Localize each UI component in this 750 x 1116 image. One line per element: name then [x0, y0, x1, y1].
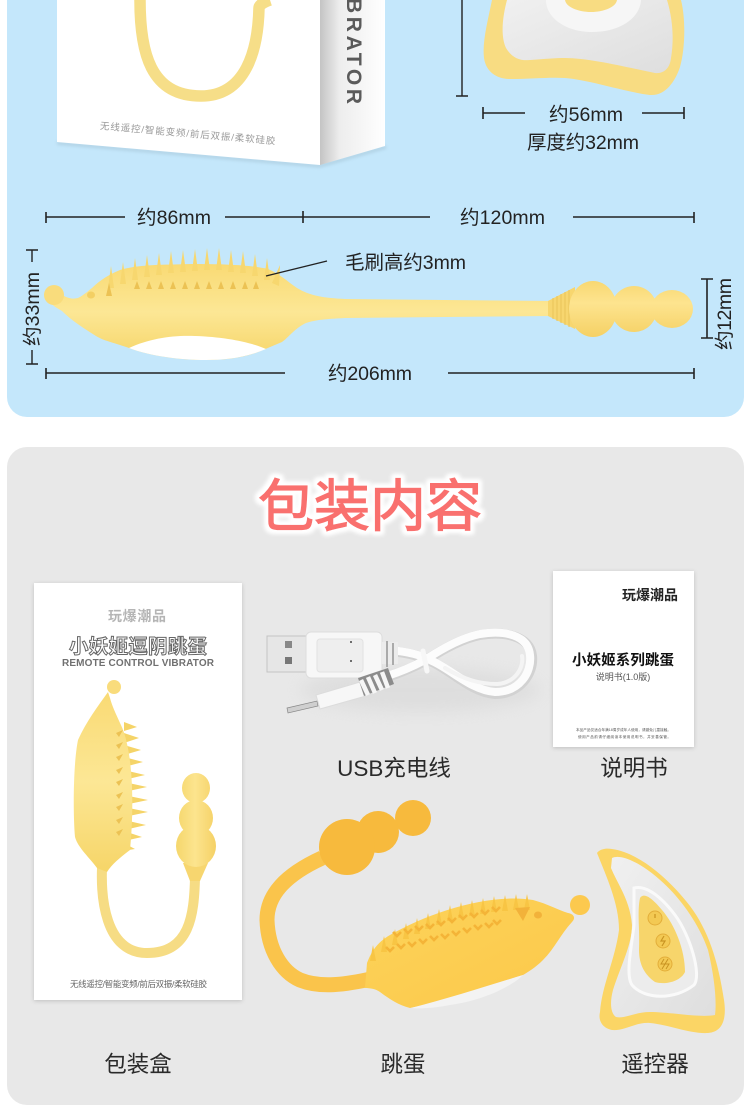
panel: dimensions [7, 0, 744, 417]
manual subtitle: 说明书(1.0版) [596, 671, 650, 682]
usb metal plug [267, 636, 308, 672]
dimension: 86mm [46, 207, 303, 229]
manual note [576, 727, 671, 739]
dimension: 120mm [303, 207, 694, 229]
dimension: 33mm [22, 250, 44, 364]
remote button pad [639, 896, 685, 983]
dimension: remote width: 约56mm [549, 104, 623, 126]
tail stem and body [50, 264, 552, 360]
manual note: 使用产品前请仔细阅读本使用说明书，并妥善保管。 [578, 734, 671, 739]
dimension: 86mm: 约86mm [137, 207, 211, 229]
white belly [129, 336, 266, 360]
label: box: 包装盒 [104, 1052, 172, 1077]
egg nose [570, 895, 590, 915]
bristle callout: 毛刷高约3mm [345, 252, 466, 274]
box side text: BRATOR [342, 0, 365, 104]
label: egg: 跳蛋 [380, 1052, 426, 1077]
egg white belly [411, 975, 523, 1008]
dimension: 12mm: 约12mm [714, 278, 736, 350]
packaging box, cropped at top [57, 0, 386, 166]
label: remote: 遥控器 [621, 1052, 689, 1077]
dimension: 206mm: 约206mm [328, 363, 412, 385]
dimension: remote height [456, 0, 468, 96]
remote inner ring [629, 887, 697, 996]
bristle bumps [106, 281, 259, 296]
item: usb cable [267, 632, 540, 713]
manual title: 小妖姬系列跳蛋 [572, 651, 674, 669]
box caption: 无线遥控/智能变频/前后双振/柔软硅胶 [70, 979, 207, 989]
product side view [44, 248, 693, 360]
dimension: 12mm [701, 278, 736, 350]
dimension: 33mm: 约33mm [22, 272, 44, 346]
remote white face [611, 857, 716, 1017]
usb housing [306, 632, 398, 678]
cable [387, 633, 532, 694]
item: package box [34, 583, 242, 1000]
box tube [140, 0, 270, 96]
box caption: 无线遥控/智能变频/前后双振/柔软硅胶 [99, 120, 276, 147]
box subtitle: REMOTE CONTROL VIBRATOR [62, 658, 215, 669]
egg body [365, 899, 574, 1008]
thickness text: 厚度约32mm [527, 132, 639, 154]
manual logo: 玩爆潮品 [622, 587, 678, 603]
ridged collar [548, 287, 575, 329]
egg spikes [370, 894, 530, 961]
label: usb cable: USB充电线 [337, 756, 451, 781]
label: manual: 说明书 [600, 756, 668, 781]
egg tube [267, 858, 375, 985]
dc plug [287, 668, 394, 713]
product front view [74, 680, 216, 953]
item: remote [597, 849, 725, 1033]
head ball [44, 285, 64, 305]
spikes [108, 248, 280, 288]
egg ear and eye [515, 907, 542, 921]
manual note: 本品产品仅适合年满18周岁成年人使用，请避免儿童接触。 [576, 727, 671, 732]
item: manual [553, 571, 694, 747]
item: egg [267, 800, 590, 1008]
box title: 小妖姬逗阴跳蛋 [69, 636, 207, 658]
remote yellow shell [597, 849, 725, 1033]
egg chevrons [386, 907, 501, 951]
panel: package contents [7, 447, 744, 1105]
dimension: remote width [483, 104, 684, 126]
heading: 包装内容 [258, 475, 482, 538]
beads [569, 281, 693, 337]
dimension: 120mm: 约120mm [460, 207, 545, 229]
remote top view, cropped at top [484, 0, 684, 95]
box logo: 玩爆潮品 [108, 608, 166, 624]
egg beads [319, 800, 431, 875]
bristle callout [266, 252, 466, 276]
dimension: 206mm [46, 363, 694, 385]
eye [87, 292, 95, 298]
